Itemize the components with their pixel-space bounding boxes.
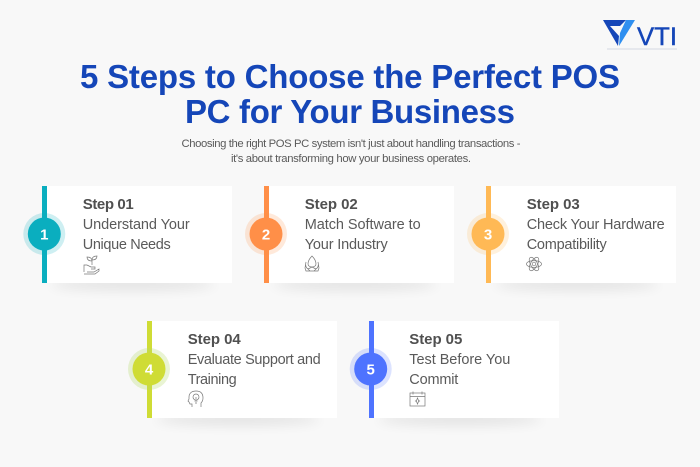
panel: step 1: Step 01 (83, 196, 134, 213)
panel: step 5: Test Before You (409, 352, 510, 368)
title (80, 58, 620, 130)
panel: step 2: Step 02 (305, 196, 358, 213)
panel: step 2 (245, 186, 454, 290)
panel: step 1 (23, 186, 232, 290)
title: PC for Your Business (185, 93, 515, 130)
panel: step 3 (467, 186, 676, 290)
icon: calendar (410, 392, 425, 406)
panel: step 5: Step 05 (409, 331, 462, 348)
panel: step 1: Unique Needs (83, 237, 171, 253)
subtitle: Choosing the right POS PC system isn't just about handling transactions - (182, 138, 521, 150)
icon: lotus (305, 256, 319, 271)
panel: step 1: 1 (40, 226, 48, 244)
panel: step 5: Commit (409, 372, 458, 388)
panel: step 3: Check Your Hardware (527, 217, 665, 233)
panel: step 4: Step 04 (188, 331, 241, 348)
panel: step 5 (350, 321, 559, 425)
icon: atom (526, 256, 542, 272)
panel: step 4: Training (188, 372, 237, 388)
subtitle (182, 138, 521, 165)
panel: step 1: Understand Your (83, 217, 190, 233)
logo: VTI (603, 20, 677, 51)
subtitle: it's about transforming how your business operates. (231, 153, 471, 165)
icon: head with light bulb (188, 391, 203, 407)
panel: step 3: Compatibility (527, 237, 607, 253)
panel: step 5: 5 (367, 362, 375, 378)
panel: step 4: 4 (145, 362, 154, 378)
panel: step 4 (128, 321, 337, 425)
logo: VTI: VTI (637, 23, 677, 51)
panel: step 3: Step 03 (527, 196, 580, 213)
panel: step 4: Evaluate Support and (188, 352, 321, 368)
title: 5 Steps to Choose the Perfect POS (80, 58, 620, 95)
panel: step 2: Match Software to (305, 217, 421, 233)
panel: step 2: 2 (262, 226, 270, 244)
panel: step 3: 3 (484, 226, 492, 244)
panel: step 2: Your Industry (305, 237, 388, 253)
icon: hand with plant (84, 256, 99, 274)
